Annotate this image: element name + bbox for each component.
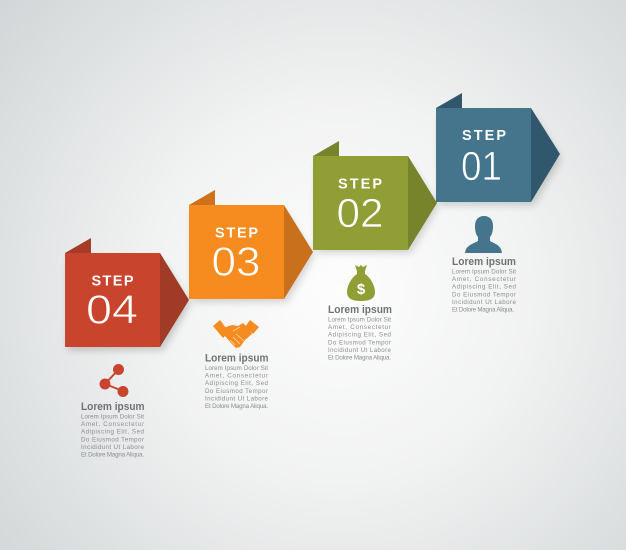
- text block: step 01: Lorem Ipsum Dolor Sit: [452, 268, 516, 276]
- square: [313, 156, 408, 250]
- icon: handshake: [213, 320, 259, 348]
- icon: person: [465, 216, 502, 253]
- icon: share: [100, 364, 128, 397]
- text block: step 04: Et Dolore Magna Aliqua.: [81, 452, 144, 458]
- text block: step 03: Do Eiusmod Tempor: [205, 388, 268, 395]
- text block: step 03: Incididunt Ut Labore: [205, 396, 269, 402]
- text block: step 02: Adipiscing Elit, Sed: [328, 332, 392, 339]
- text block: step 04: Adipiscing Elit, Sed: [81, 429, 145, 436]
- flap: [436, 93, 462, 108]
- text block: step 03: Amet, Consectetur: [205, 372, 268, 380]
- text block: step 01: Do Eiusmod Tempor: [452, 291, 516, 298]
- text block: step 04: [81, 401, 145, 458]
- square: [189, 205, 284, 299]
- icon: money bag: $: [357, 281, 366, 298]
- step number: 02: [336, 190, 384, 236]
- square: [65, 253, 160, 347]
- panel: step 01: [436, 93, 561, 205]
- text block: step 02: Amet, Consectetur: [328, 324, 391, 331]
- text block: step 04: Amet, Consectetur: [81, 421, 144, 428]
- text block: step 03: Adipiscing Elit, Sed: [205, 380, 269, 387]
- text block: step 04: Incididunt Ut Labore: [81, 444, 145, 451]
- text block: step 03: Et Dolore Magna Aliqua.: [205, 403, 268, 410]
- panel: step 02: [313, 141, 438, 253]
- text block: step 04: Lorem Ipsum Dolor Sit: [81, 414, 144, 420]
- step label: STEP: [92, 274, 134, 290]
- icon: money bag: [347, 265, 375, 301]
- text block: step 01: Amet, Consectetur: [452, 276, 516, 283]
- step label: STEP: [338, 176, 382, 192]
- text block: step 03: [205, 352, 269, 410]
- text block: step 02: Do Eiusmod Tempor: [328, 339, 391, 346]
- text block: step 02: Lorem ipsum: [328, 304, 392, 316]
- step number: 04: [86, 286, 138, 332]
- text block: step 01: Adipiscing Elit, Sed: [452, 284, 517, 291]
- arrow: [531, 108, 560, 202]
- flap: [189, 190, 215, 205]
- arrow: [408, 156, 437, 250]
- text block: step 02: Lorem Ipsum Dolor Sit: [328, 316, 391, 324]
- text block: step 04: Lorem ipsum: [81, 401, 145, 413]
- step number: 03: [212, 238, 260, 284]
- flap: [313, 141, 339, 156]
- text block: step 02: Incididunt Ut Labore: [328, 347, 392, 354]
- square: [436, 108, 531, 202]
- text block: step 03: Lorem ipsum: [205, 352, 269, 364]
- text block: step 04: Do Eiusmod Tempor: [81, 436, 144, 443]
- text block: step 02: Et Dolore Magna Aliqua.: [328, 354, 391, 362]
- text block: step 02: [328, 304, 392, 362]
- panel: step 04: [65, 238, 190, 350]
- step label: STEP: [215, 226, 258, 242]
- text block: step 01: [452, 256, 517, 314]
- flap: [65, 238, 91, 253]
- text block: step 01: Incididunt Ut Labore: [452, 299, 517, 306]
- arrow: [284, 205, 313, 299]
- text block: step 01: Et Dolore Magna Aliqua.: [452, 306, 514, 314]
- panel: step 03: [189, 190, 314, 302]
- arrow: [160, 253, 189, 347]
- step number: 01: [461, 143, 502, 189]
- text block: step 01: Lorem ipsum: [452, 256, 516, 268]
- text block: step 03: Lorem Ipsum Dolor Sit: [205, 365, 268, 372]
- step label: STEP: [462, 128, 506, 144]
